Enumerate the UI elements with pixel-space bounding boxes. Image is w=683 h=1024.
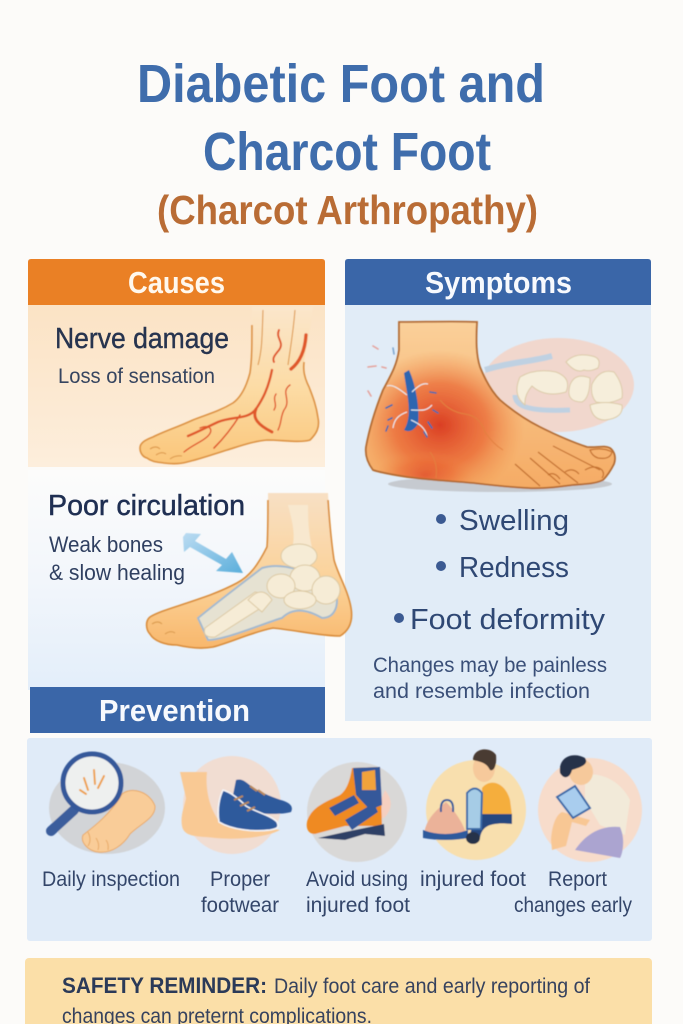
prevention header: Prevention: [99, 693, 250, 728]
nerve damage card: Nerve damage: [55, 323, 229, 355]
panel: safety reminder: [25, 958, 652, 1024]
symptoms header: Symptoms: [425, 265, 572, 300]
poor circulation card: [28, 470, 352, 690]
title: Charcot Foot: [203, 122, 491, 182]
icon: swollen charcot foot: [355, 322, 615, 500]
arrow: [183, 533, 243, 573]
title: (Charcot Arthropathy): [157, 187, 538, 233]
panel: prevention: [27, 687, 652, 941]
prevention labels: Daily inspection: [42, 868, 180, 891]
icon: person reporting on tablet: [538, 755, 642, 862]
panel: safety reminder: SAFETY REMINDER:: [62, 973, 267, 998]
prevention labels: injured foot: [306, 894, 410, 917]
icon: bones inset: [482, 338, 634, 432]
causes header: Causes: [128, 265, 225, 300]
panel: safety reminder: Daily foot care and early reporting of: [274, 975, 590, 998]
symptom list: Foot deformity: [410, 604, 606, 636]
prevention labels: footwear: [201, 894, 279, 917]
icon: foot with nerves: [140, 307, 319, 464]
panel: symptoms: [345, 259, 651, 721]
poor circulation card: Weak bones: [49, 532, 163, 557]
icon: proper footwear: [180, 756, 292, 854]
prevention labels: Report: [548, 868, 607, 891]
icon: daily inspection: [49, 754, 165, 854]
title: Diabetic Foot and: [137, 54, 545, 114]
symptom note: [373, 654, 607, 703]
symptoms header: [345, 259, 651, 305]
poor circulation card: & slow healing: [49, 560, 185, 585]
prevention labels: Proper: [210, 868, 270, 891]
title: [137, 54, 545, 233]
panel: causes: [28, 259, 352, 690]
prevention header: [30, 687, 325, 733]
symptom list: Redness: [459, 552, 569, 584]
icon: seated person with bag: [423, 749, 526, 860]
icon: foot with bones: [147, 493, 352, 648]
symptom note: and resemble infection: [373, 680, 590, 703]
causes header: [28, 259, 325, 305]
icon: protective boot: [307, 762, 407, 862]
prevention labels: Avoid using: [306, 868, 408, 891]
symptom list: Swelling: [459, 505, 569, 537]
poor circulation card: Poor circulation: [48, 490, 245, 522]
nerve damage card: Loss of sensation: [58, 365, 215, 388]
symptom list: [394, 505, 606, 636]
prevention labels: changes early: [514, 894, 632, 917]
symptom note: Changes may be painless: [373, 654, 607, 677]
prevention labels: injured foot: [420, 868, 526, 891]
prevention labels: [42, 868, 632, 917]
nerve damage card: [28, 305, 325, 467]
